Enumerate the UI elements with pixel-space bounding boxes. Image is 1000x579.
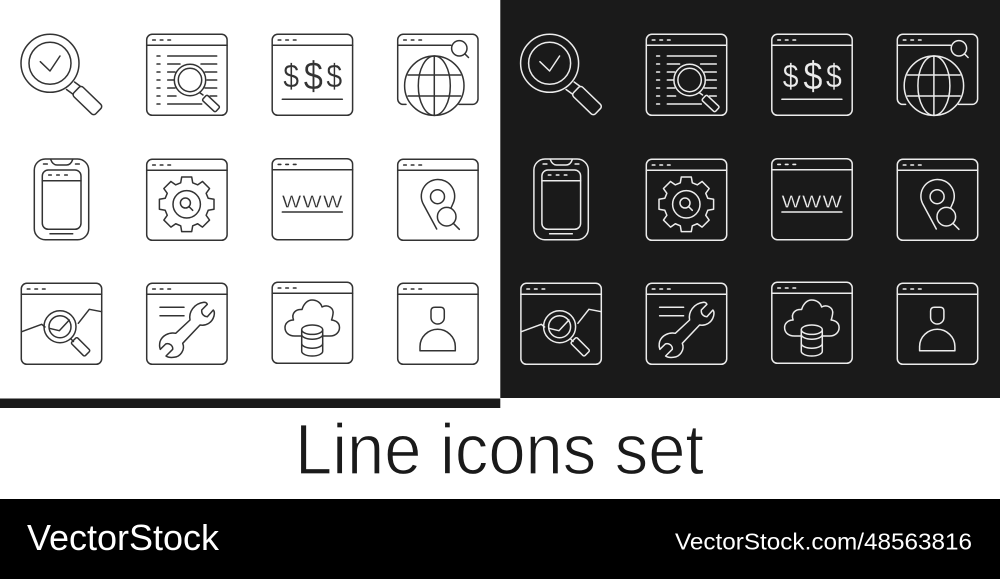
footer bar (0, 499, 1000, 579)
icon: globe search (398, 34, 478, 115)
icon: browser document search, dark (646, 34, 727, 115)
footer brand: VectorStock (27, 517, 220, 558)
icon: browser chart search (21, 283, 102, 364)
icon: browser gear search (147, 159, 227, 240)
icon: browser user profile (398, 283, 478, 364)
icon: browser www, dark: WWW (782, 192, 843, 212)
icon: browser www, dark (772, 159, 852, 240)
panel: dark icon set (500, 0, 1000, 398)
icon: browser with dollar signs, dark (772, 34, 852, 115)
icon: browser cloud database, dark (772, 282, 852, 363)
title: Line icons set (295, 411, 704, 490)
icon: browser with dollar signs: $ (283, 58, 299, 95)
icon: browser document search (147, 34, 227, 115)
icon: magnifier with check mark, dark (521, 34, 603, 116)
icon: globe search, dark (897, 34, 978, 115)
icon: browser wrench (147, 283, 227, 364)
icon: browser cloud database (272, 282, 353, 363)
icon: smartphone, dark (534, 159, 588, 240)
icon: browser with dollar signs (272, 34, 353, 115)
icon: browser with dollar signs: $ (304, 53, 323, 98)
icon: browser location pin search, dark (897, 159, 978, 240)
icon: browser with dollar signs, dark: $ (803, 53, 823, 98)
icon: browser chart search, dark (521, 283, 601, 364)
icon: browser with dollar signs, dark: $ (783, 58, 799, 95)
icon: browser wrench, dark (646, 283, 727, 364)
icon: browser www (272, 159, 353, 240)
icon: browser www: WWW (282, 192, 344, 212)
icon: browser gear search, dark (646, 159, 727, 240)
icon: magnifier with check mark (21, 34, 103, 116)
bar under light panel (0, 398, 500, 408)
dark icons (521, 34, 978, 364)
icon: browser with dollar signs: $ (326, 58, 342, 95)
panel: light icon set (21, 34, 478, 364)
icon: smartphone (34, 159, 89, 240)
icon: browser with dollar signs, dark: $ (826, 58, 842, 95)
icon: browser user profile, dark (897, 283, 978, 364)
icon: browser location pin search (398, 159, 478, 240)
footer image id: VectorStock.com/48563816 (675, 528, 972, 554)
